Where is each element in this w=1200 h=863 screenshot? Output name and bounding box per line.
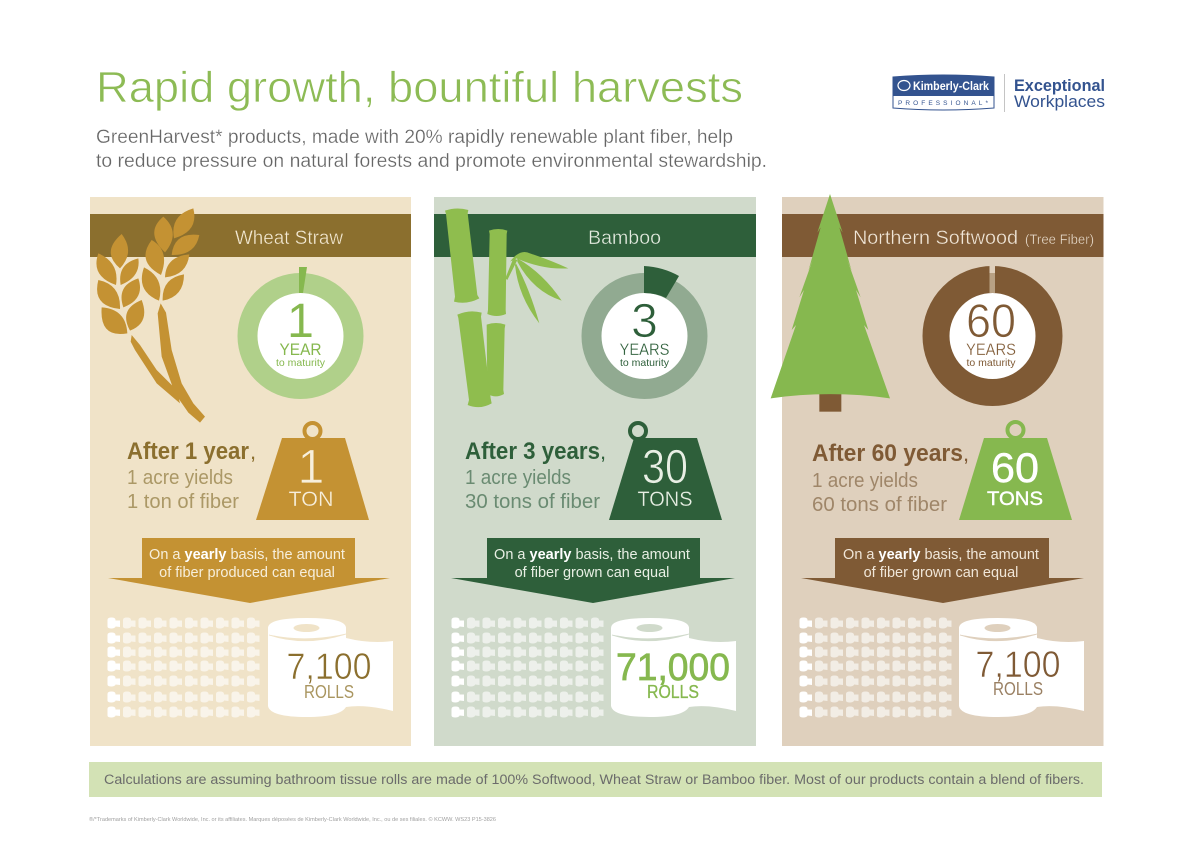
title: Rapid growth, bountiful harvests: [96, 63, 743, 112]
donut chart: 3 years: 3: [631, 295, 658, 348]
weight: 60 tons: 60: [991, 444, 1039, 491]
arrow callout: On a yearly basis, the amount: [494, 547, 690, 563]
donut chart: 3 years: YEARS: [620, 341, 670, 359]
panel background: [782, 197, 1104, 746]
logo: Kimberly-Clark: [913, 81, 990, 93]
big roll: 71,000 rolls: 71,000: [616, 647, 730, 689]
legal text: ®/*Trademarks of Kimberly-Clark Worldwide, Inc. or its affiliates. Marques déposées de Kimberly-Clark Worldwide, Inc., ou de ses filiales. © KCWW. WS23 P15-3826: [89, 816, 496, 823]
yield text: After 3 years: [465, 438, 600, 465]
donut chart: 60 years: YEARS: [966, 341, 1016, 359]
heading: Wheat Straw: [235, 228, 343, 249]
icon: wheat: [96, 208, 205, 423]
header band: [434, 214, 756, 257]
yield text: [465, 438, 606, 513]
arrow callout: of fiber produced can equal: [159, 565, 335, 581]
logo: [893, 74, 1105, 112]
icon grid: small rolls: [452, 618, 604, 718]
icon: tree: [771, 194, 890, 412]
yield text: 60 tons of fiber: [812, 494, 947, 516]
intro text: to reduce pressure on natural forests and promote environmental stewardship.: [96, 151, 767, 172]
weight: 1 ton: [256, 423, 369, 520]
footnote bar: [89, 762, 1102, 797]
panel background: [90, 197, 411, 746]
yield text: 30 tons of fiber: [465, 491, 600, 513]
arrow callout: On a yearly basis, the amount: [149, 547, 345, 563]
header band: [90, 214, 411, 257]
donut chart: 1 year: 1: [287, 295, 314, 348]
yield text: [127, 438, 256, 513]
weight: 1 ton: TON: [288, 487, 334, 511]
big roll: 7,100 rolls: 7,100: [976, 644, 1060, 685]
big roll: 7,100 rolls: ROLLS: [993, 679, 1043, 699]
panel: bamboo: [434, 197, 756, 746]
intro text: [96, 127, 767, 172]
panel background: [434, 197, 756, 746]
yield text: 1 ton of fiber: [127, 491, 239, 513]
intro text: GreenHarvest* products, made with 20% rapidly renewable plant fiber, help: [96, 127, 733, 148]
big roll: 71,000 rolls: ROLLS: [647, 682, 699, 702]
logo: PROFESSIONAL*: [898, 100, 988, 107]
heading: [853, 228, 1094, 249]
yield text: 1 acre yields: [465, 467, 571, 489]
weight: 1 ton: 1: [298, 441, 324, 494]
heading: Bamboo: [588, 228, 661, 249]
panel: wheat straw: [90, 197, 411, 746]
yield text: ,: [600, 439, 606, 464]
big roll: 71,000 rolls: [611, 618, 736, 717]
footnote bar: Calculations are assuming bathroom tissue rolls are made of 100% Softwood, Wheat Straw or Bamboo fiber. Most of our products contain a blend of fibers.: [104, 772, 1084, 787]
heading: Northern Softwood: [853, 228, 1018, 249]
big roll: 7,100 rolls: ROLLS: [304, 682, 354, 702]
arrow callout: On a yearly basis, the amount: [843, 547, 1039, 563]
icon grid: small rolls: [108, 618, 260, 718]
arrow callout: [801, 538, 1084, 603]
logo: Workplaces: [1014, 93, 1105, 111]
yield text: 1 acre yields: [127, 467, 233, 489]
big roll: 7,100 rolls: 7,100: [286, 646, 372, 687]
logo: Exceptional: [1014, 77, 1105, 95]
big roll: 7,100 rolls: [268, 618, 393, 717]
donut chart: 60 years: to maturity: [966, 357, 1016, 369]
donut chart: 3 years: [592, 266, 698, 389]
yield text: After 1 year: [127, 438, 249, 465]
yield text: 1 acre yields: [812, 470, 918, 492]
header band: [782, 214, 1104, 257]
donut chart: 1 year: to maturity: [276, 357, 326, 369]
yield text: ,: [963, 441, 969, 466]
panel: northern softwood: [771, 194, 1104, 746]
arrow callout: of fiber grown can equal: [515, 565, 669, 581]
weight: 30 tons: [609, 423, 722, 520]
weight: 30 tons: 30: [642, 441, 688, 494]
icon: bamboo: [445, 208, 568, 407]
weight: 60 tons: TONS: [987, 489, 1043, 510]
yield text: After 60 years: [812, 440, 963, 467]
arrow callout: [108, 538, 390, 603]
donut chart: 60 years: 60: [966, 294, 1016, 347]
yield text: ,: [250, 439, 256, 464]
heading: (Tree Fiber): [1025, 232, 1094, 247]
yield text: [812, 440, 969, 516]
arrow callout: of fiber grown can equal: [864, 565, 1018, 581]
donut chart: 1 year: YEAR: [280, 341, 322, 359]
big roll: 7,100 rolls: [959, 618, 1084, 717]
donut chart: 3 years: to maturity: [620, 357, 670, 369]
icon grid: small rolls: [800, 618, 952, 718]
arrow callout: [451, 538, 735, 603]
weight: 60 tons: [959, 422, 1072, 520]
donut chart: 1 year: [248, 267, 354, 389]
weight: 30 tons: TONS: [638, 487, 692, 511]
donut chart: 60 years: [936, 266, 1049, 392]
